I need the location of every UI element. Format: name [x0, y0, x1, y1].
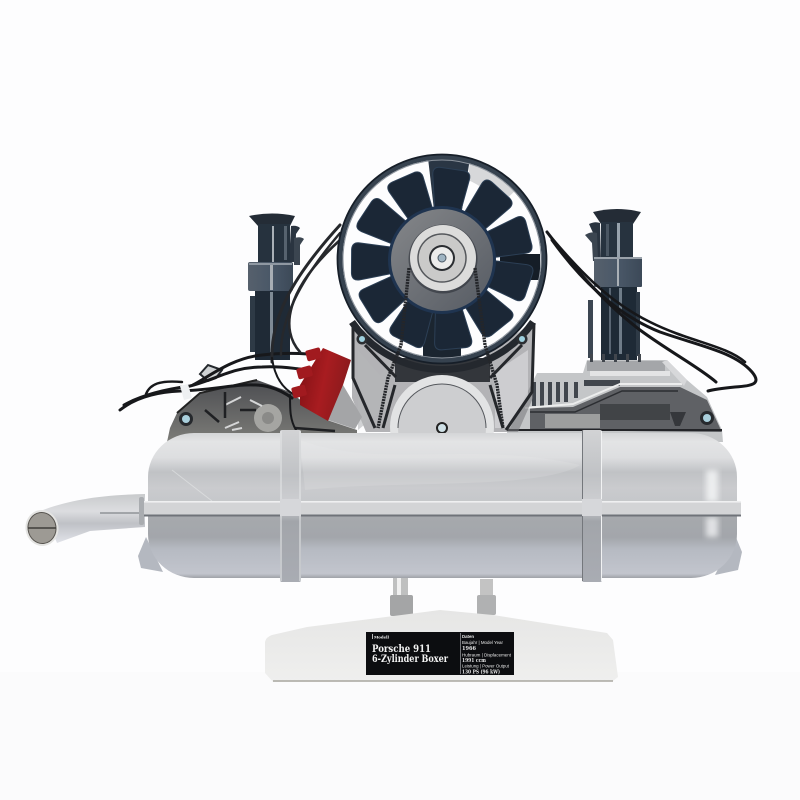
right cylinder fins and crankcase [507, 354, 723, 442]
placard: model name: Porsche 911 [372, 643, 431, 655]
belt pulley [390, 375, 494, 479]
placard: model name: Modell [374, 634, 389, 640]
wires: left bundle [120, 225, 340, 430]
lower rear engine brackets [138, 535, 742, 575]
centre frame [352, 322, 534, 432]
wire tie [180, 384, 192, 400]
fan backing [428, 158, 470, 210]
placard: data: Daten [462, 634, 474, 639]
left carburetor stacks [248, 214, 304, 360]
placard: data: Baujahr | Model Year [462, 640, 503, 645]
placard: data [462, 634, 512, 676]
icon: left bolt [179, 412, 193, 426]
drive belt [378, 268, 503, 428]
placard [366, 632, 514, 676]
distributor [291, 347, 362, 429]
exhaust pipe [23, 494, 145, 548]
placard: model name [372, 634, 448, 665]
left crankcase [167, 365, 357, 442]
muffler highlights [172, 440, 718, 537]
floor reflection [0, 672, 800, 800]
left strap [280, 430, 301, 582]
seam [139, 497, 741, 525]
right carburetor stacks [585, 209, 642, 362]
fan ring [338, 154, 546, 369]
placard: model name: 6-Zylinder Boxer [372, 653, 448, 665]
fan hub [388, 206, 496, 314]
placard: data: 1966 [462, 646, 476, 652]
pipe opening [23, 508, 61, 548]
stand posts [390, 578, 496, 616]
wires: right bundle [547, 232, 756, 391]
fan [338, 154, 546, 428]
placard: data: 130 PS (96 kW) [462, 668, 500, 676]
placard: data: 1991 ccm [462, 658, 486, 664]
placard: data: Hubraum | Displacement [462, 652, 512, 658]
stand base [265, 610, 618, 682]
muffler [139, 430, 741, 582]
right strap [582, 430, 602, 582]
placard: data: Leistung | Power Output [462, 664, 510, 668]
icon: right bolt [700, 411, 714, 425]
fan blades [350, 167, 535, 352]
icon: frame bolts [356, 334, 528, 344]
